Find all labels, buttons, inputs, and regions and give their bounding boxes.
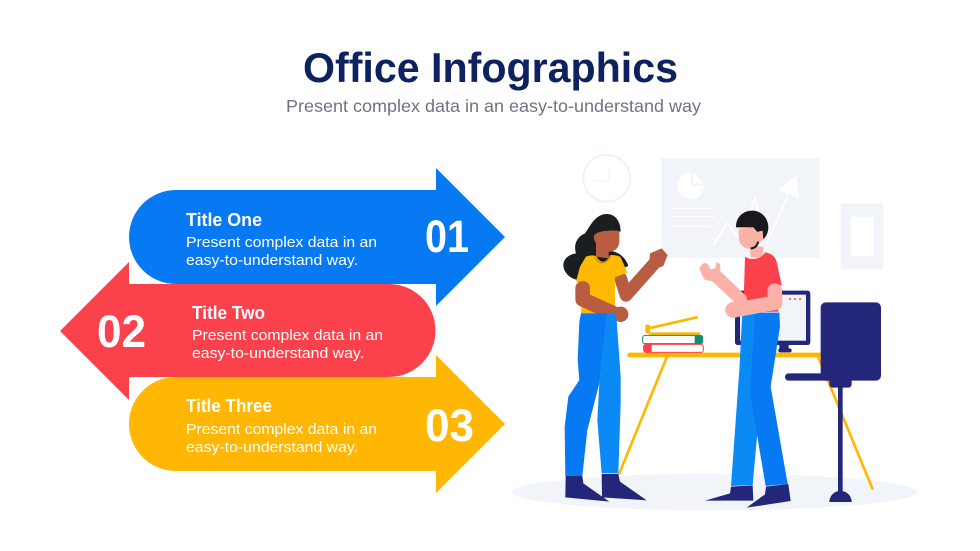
red arrow description: easy-to-understand way. bbox=[192, 345, 364, 362]
man raised arm bbox=[715, 275, 741, 299]
blue arrow title: Title One bbox=[186, 210, 262, 230]
title: Office Infographics bbox=[303, 44, 678, 91]
wall chart board bbox=[662, 158, 819, 258]
blue arrow shape bbox=[129, 168, 505, 306]
blue arrow number: 01 bbox=[425, 211, 469, 262]
monitor bbox=[735, 291, 810, 352]
woman neck and face bbox=[594, 230, 619, 258]
desk bbox=[619, 353, 872, 488]
subtitle: Present complex data in an easy-to-understand way bbox=[286, 96, 701, 116]
woman shirt collar bbox=[595, 255, 611, 263]
yellow arrow description: Present complex data in an bbox=[186, 421, 377, 438]
ground shadow bbox=[512, 474, 917, 510]
yellow arrow description: easy-to-understand way. bbox=[186, 439, 358, 456]
office chair bbox=[785, 302, 881, 502]
red arrow description: Present complex data in an bbox=[192, 327, 383, 344]
man shirt bbox=[743, 252, 782, 313]
man open hand bbox=[699, 262, 721, 282]
woman hair bbox=[563, 214, 628, 280]
woman hand bbox=[613, 307, 628, 322]
woman shirt bbox=[576, 255, 627, 314]
arrow panel 2: red bbox=[60, 262, 435, 400]
office illustration bbox=[512, 155, 917, 510]
woman raised fist bbox=[649, 248, 668, 269]
man face bbox=[739, 227, 763, 249]
man legs bbox=[731, 313, 788, 486]
blue arrow description: Present complex data in an bbox=[186, 234, 377, 251]
man lower arm bbox=[735, 291, 775, 310]
man hair bbox=[736, 211, 768, 239]
wall clock bbox=[583, 155, 630, 202]
red arrow number: 02 bbox=[97, 306, 146, 357]
woman figure bbox=[563, 214, 668, 502]
woman legs bbox=[565, 313, 621, 476]
man neck bbox=[750, 247, 763, 257]
woman lower arm bbox=[583, 288, 615, 314]
red arrow shape bbox=[60, 262, 435, 400]
man hand bbox=[725, 302, 741, 318]
red arrow title: Title Two bbox=[192, 303, 265, 323]
blue arrow description: easy-to-understand way. bbox=[186, 252, 358, 269]
books and ruler bbox=[643, 317, 703, 353]
man shoes bbox=[705, 484, 791, 508]
woman raised arm bbox=[621, 263, 655, 295]
arrow panel 3: yellow bbox=[129, 355, 505, 493]
wall picture frame bbox=[841, 203, 883, 269]
yellow arrow title: Title Three bbox=[186, 396, 272, 416]
yellow arrow shape bbox=[129, 355, 505, 493]
yellow arrow number: 03 bbox=[425, 400, 474, 451]
woman shoes bbox=[565, 474, 647, 502]
arrow panel 1: blue bbox=[129, 168, 505, 306]
man smile bbox=[751, 242, 758, 248]
man figure bbox=[699, 211, 791, 508]
